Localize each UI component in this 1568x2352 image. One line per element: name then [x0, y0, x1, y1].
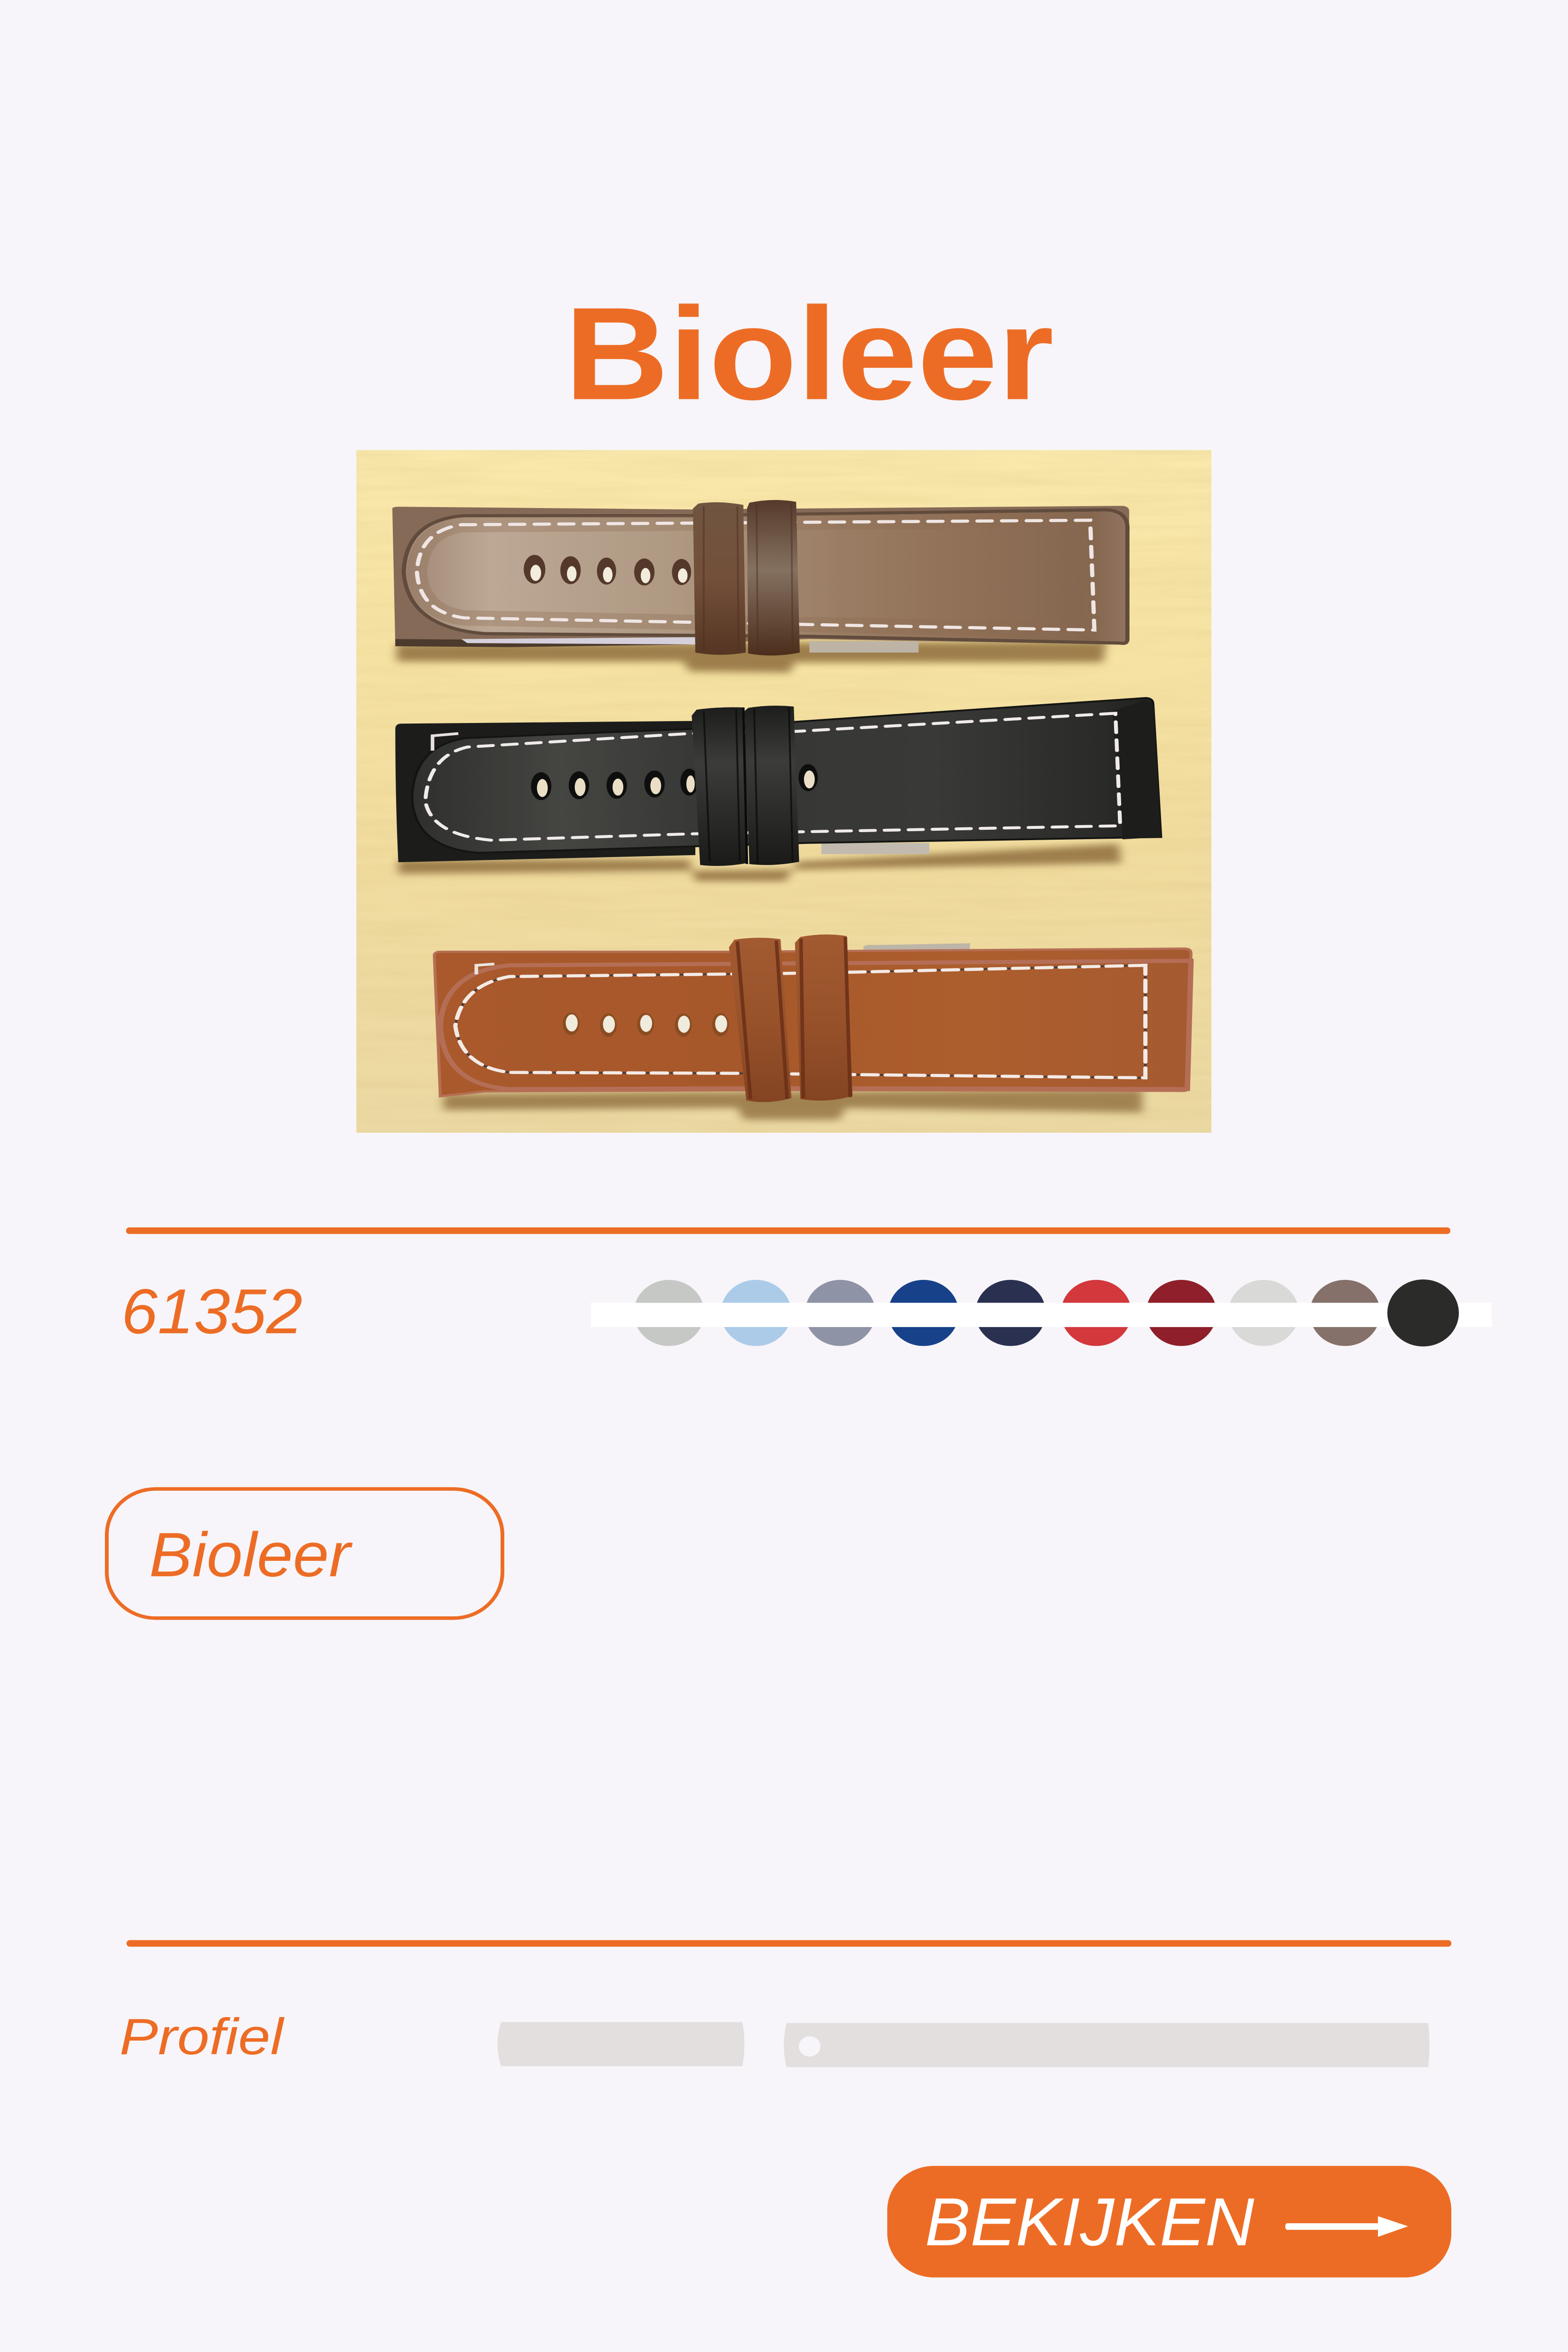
profile bar: short — [498, 2022, 744, 2066]
loops — [693, 502, 746, 655]
title: Bioleer — [565, 280, 1054, 427]
holes — [563, 1013, 729, 1037]
material tag — [107, 1489, 502, 1618]
article number: 61352 — [121, 1276, 302, 1347]
icon: arrow — [1285, 2216, 1408, 2237]
wood background — [356, 450, 1211, 1133]
photo: three leather watch straps on wood — [356, 450, 1211, 1133]
top divider — [126, 1227, 1450, 1234]
material tag: Bioleer — [149, 1520, 353, 1590]
button — [887, 2166, 1451, 2278]
strap: black — [395, 698, 1161, 881]
loops — [692, 707, 747, 866]
colour swatches — [591, 1279, 1492, 1346]
strap: brown — [392, 500, 1129, 673]
bottom divider — [127, 1940, 1451, 1947]
strap: tan — [434, 935, 1191, 1120]
holes — [524, 555, 691, 586]
profile bar: long with hole — [784, 2023, 1429, 2067]
button: BEKIJKEN — [925, 2184, 1254, 2260]
loops — [729, 938, 791, 1102]
holes — [531, 764, 818, 800]
profile label: Profiel — [119, 2008, 285, 2065]
